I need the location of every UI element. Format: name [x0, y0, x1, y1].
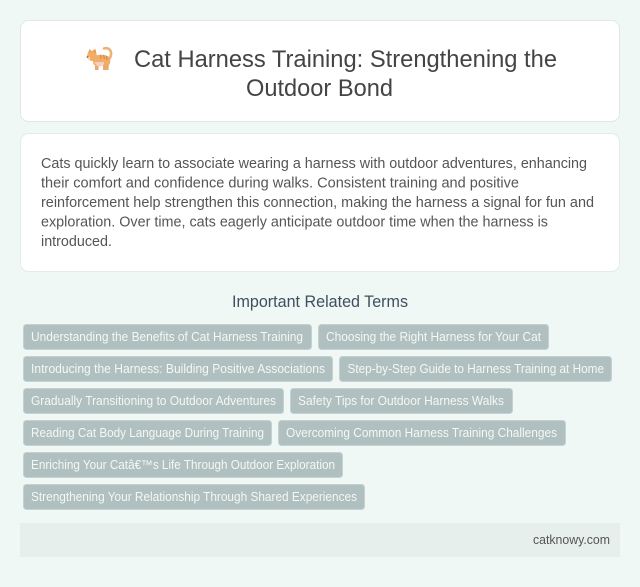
tag: safety tips: Safety Tips for Outdoor Harness Walks	[298, 394, 504, 408]
tag: step-by-step guide: Step-by-Step Guide to Harness Training at Home	[348, 362, 604, 376]
tag: choosing harness	[318, 324, 548, 350]
tag: body language	[24, 420, 272, 446]
tag: understanding benefits: Understanding the Benefits of Cat Harness Training	[31, 330, 303, 344]
tag: body language: Reading Cat Body Language During Training	[31, 426, 264, 440]
text block: summary lines	[41, 156, 594, 250]
tag: overcoming challenges	[278, 420, 566, 446]
title: line 2: Outdoor Bond	[246, 75, 393, 102]
panel: related term tags	[24, 324, 612, 510]
text block: summary lines: exploration. Over time, cats eagerly anticipate outdoor time when the harness is	[41, 214, 548, 230]
tag: strengthening relationship: Strengthening Your Relationship Through Shared Experiences	[31, 490, 357, 504]
tag: choosing harness: Choosing the Right Harness for Your Cat	[326, 330, 541, 344]
tag: step-by-step guide	[340, 356, 612, 382]
tag: enriching life	[24, 452, 342, 478]
title: line 1: Cat Harness Training: Strengthening the	[134, 46, 557, 73]
tag: safety tips	[290, 388, 512, 414]
tag: understanding benefits	[24, 324, 312, 350]
tag: gradual transition: Gradually Transitioning to Outdoor Adventures	[31, 394, 276, 408]
panel: summary paragraph	[20, 134, 620, 272]
tag: enriching life: Enriching Your Catâ€™s Life Through Outdoor Exploration	[31, 458, 335, 472]
text block: summary lines: introduced.	[41, 234, 112, 250]
panel: title card	[20, 20, 620, 122]
text block: summary lines: Cats quickly learn to associate wearing a harness with outdoor adventures, enhancing	[41, 156, 587, 172]
tag: strengthening relationship	[24, 484, 364, 510]
text block: summary lines: their comfort and confidence during walks. Consistent training and positive	[41, 176, 519, 192]
heading: related terms: Important Related Terms	[232, 293, 408, 311]
tag: introducing harness: Introducing the Harness: Building Positive Associations	[31, 362, 325, 376]
tag: gradual transition	[24, 388, 284, 414]
footer: site name: catknowy.com	[533, 532, 610, 547]
icon: cat	[87, 48, 111, 70]
tag: introducing harness	[24, 356, 332, 382]
text block: summary lines: reinforcement help strengthen this connection, making the harness a signal for fun and	[41, 195, 594, 211]
tag: overcoming challenges: Overcoming Common Harness Training Challenges	[286, 426, 557, 440]
footer	[20, 523, 620, 557]
